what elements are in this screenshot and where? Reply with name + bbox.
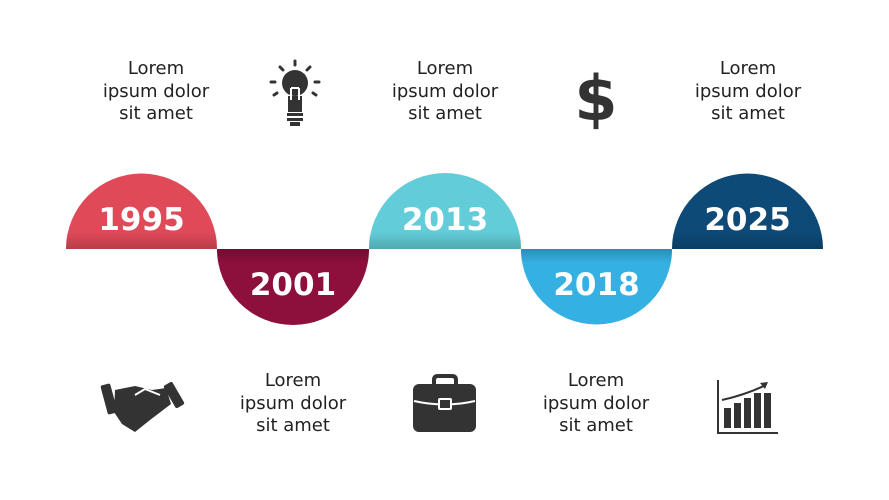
semicircle 1995: 1995: [98, 202, 185, 238]
icon: briefcase: [413, 376, 476, 432]
text: top 2: [392, 58, 498, 124]
semicircle 2001: [217, 249, 369, 325]
text: bottom 1: ipsum dolor: [240, 392, 346, 414]
text: bottom 1: sit amet: [256, 415, 330, 436]
text: bottom 1: Lorem: [265, 370, 321, 391]
text: top 3: ipsum dolor: [695, 80, 801, 102]
text: top 2: ipsum dolor: [392, 80, 498, 102]
semicircle 2018: 2018: [553, 267, 640, 303]
text: bottom 2: ipsum dolor: [543, 392, 649, 414]
semicircle 2013: 2013: [402, 202, 488, 238]
text: top 1: [103, 58, 210, 124]
text: top 1: Lorem: [128, 58, 184, 79]
text: top 3: Lorem: [720, 58, 776, 79]
text: bottom 2: [543, 370, 650, 436]
text: top 1: sit amet: [119, 103, 193, 124]
icon: handshake: [100, 381, 185, 432]
semicircle 2025: 2025: [704, 202, 791, 238]
text: bottom 2: sit amet: [559, 415, 633, 436]
text: top 3: sit amet: [711, 103, 785, 124]
text: bottom 1: [240, 370, 346, 436]
semicircle 2013: [369, 173, 521, 249]
text: top 2: sit amet: [408, 103, 482, 124]
icon: dollar: $: [574, 62, 618, 135]
icon: growth chart: [718, 380, 778, 433]
text: top 2: Lorem: [417, 58, 473, 79]
text: top 3: [695, 58, 802, 124]
text: bottom 2: Lorem: [568, 370, 624, 391]
semicircle 2001: 2001: [250, 267, 336, 303]
semicircle 2018: [521, 249, 672, 324]
text: top 1: ipsum dolor: [103, 80, 209, 102]
icon: light bulb: [271, 61, 319, 126]
semicircle 1995: [66, 174, 217, 249]
semicircle 2025: [672, 174, 823, 249]
